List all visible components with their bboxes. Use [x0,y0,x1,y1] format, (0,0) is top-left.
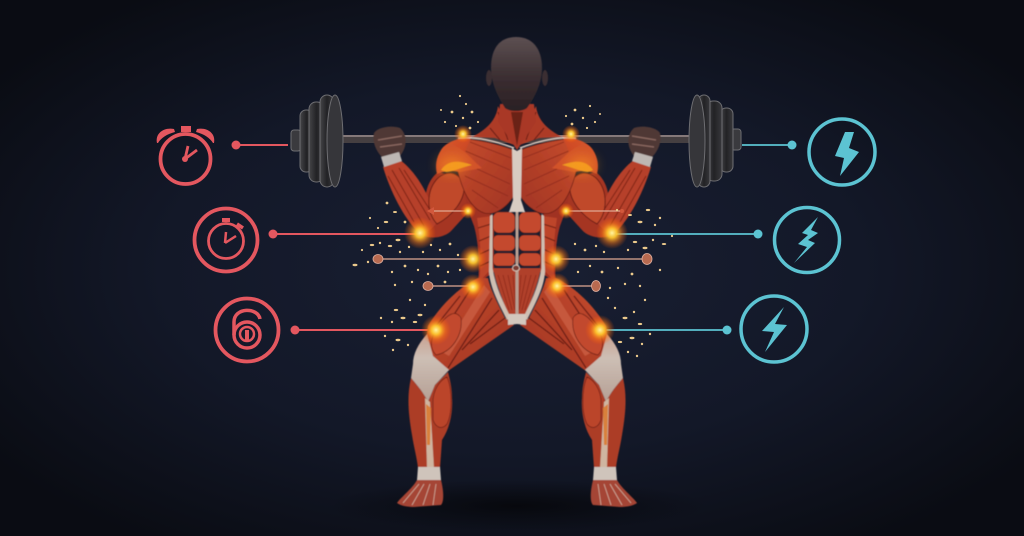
clavicle [458,138,514,148]
lat and side torso [464,190,494,283]
pointer hip left [423,282,476,290]
sparks [352,95,673,357]
pointer waist right [558,254,652,264]
wrist band [381,152,402,167]
rectus femoris strip [442,285,490,356]
line 1 [232,140,288,150]
line 3 [290,326,436,334]
neck side [472,106,517,146]
navel [512,265,520,271]
pointer hip right [556,280,600,292]
knee tendon [411,334,449,402]
shoulder glows [438,156,596,174]
head [491,37,542,111]
linea alba side [489,214,511,320]
deltoid [436,136,472,174]
barbell [291,95,741,187]
vastus [431,314,461,355]
icon: lightning bolt 2 [774,208,840,272]
sternum [509,148,525,212]
ears [486,70,548,86]
icon: lock [216,298,278,362]
ankle wrap [417,467,441,480]
thigh [426,278,514,371]
pointer upper right [566,209,624,213]
bar [338,135,694,143]
left plates [291,95,343,187]
shin tendon [425,398,434,468]
abs [493,212,515,233]
small pointer lines on torso [373,207,652,292]
icon: stopwatch [194,208,258,272]
foot [397,480,443,507]
hand [373,127,406,159]
muscular figure [373,37,661,507]
connector lines: left red [232,140,436,334]
line 6 [600,326,732,334]
line 4 [742,140,796,150]
icon: alarm clock [157,126,214,184]
groin patch [508,314,526,325]
shoulder glow patch [441,162,472,172]
pectoral [457,138,515,214]
center abdominal line and lower core [516,212,518,314]
right half of body, mirrored [517,106,661,507]
lower leg [408,372,452,468]
icon: lightning bolt 3 [741,296,807,362]
forearm [383,160,437,234]
obliques [477,216,492,282]
icon: lightning bolt 1 [809,119,875,185]
floor shadow [327,480,707,532]
right plates [689,95,741,187]
biceps highlight [429,173,464,224]
calf [433,377,451,427]
connector lines: right teal [600,140,796,334]
neck [498,104,536,150]
upper arm and triceps [420,172,472,237]
pointer waist left [373,254,472,264]
pointer upper left [427,207,470,215]
line 2 [268,230,420,238]
activation glows [404,125,628,345]
line 5 [616,230,762,238]
left half of body [373,106,517,507]
